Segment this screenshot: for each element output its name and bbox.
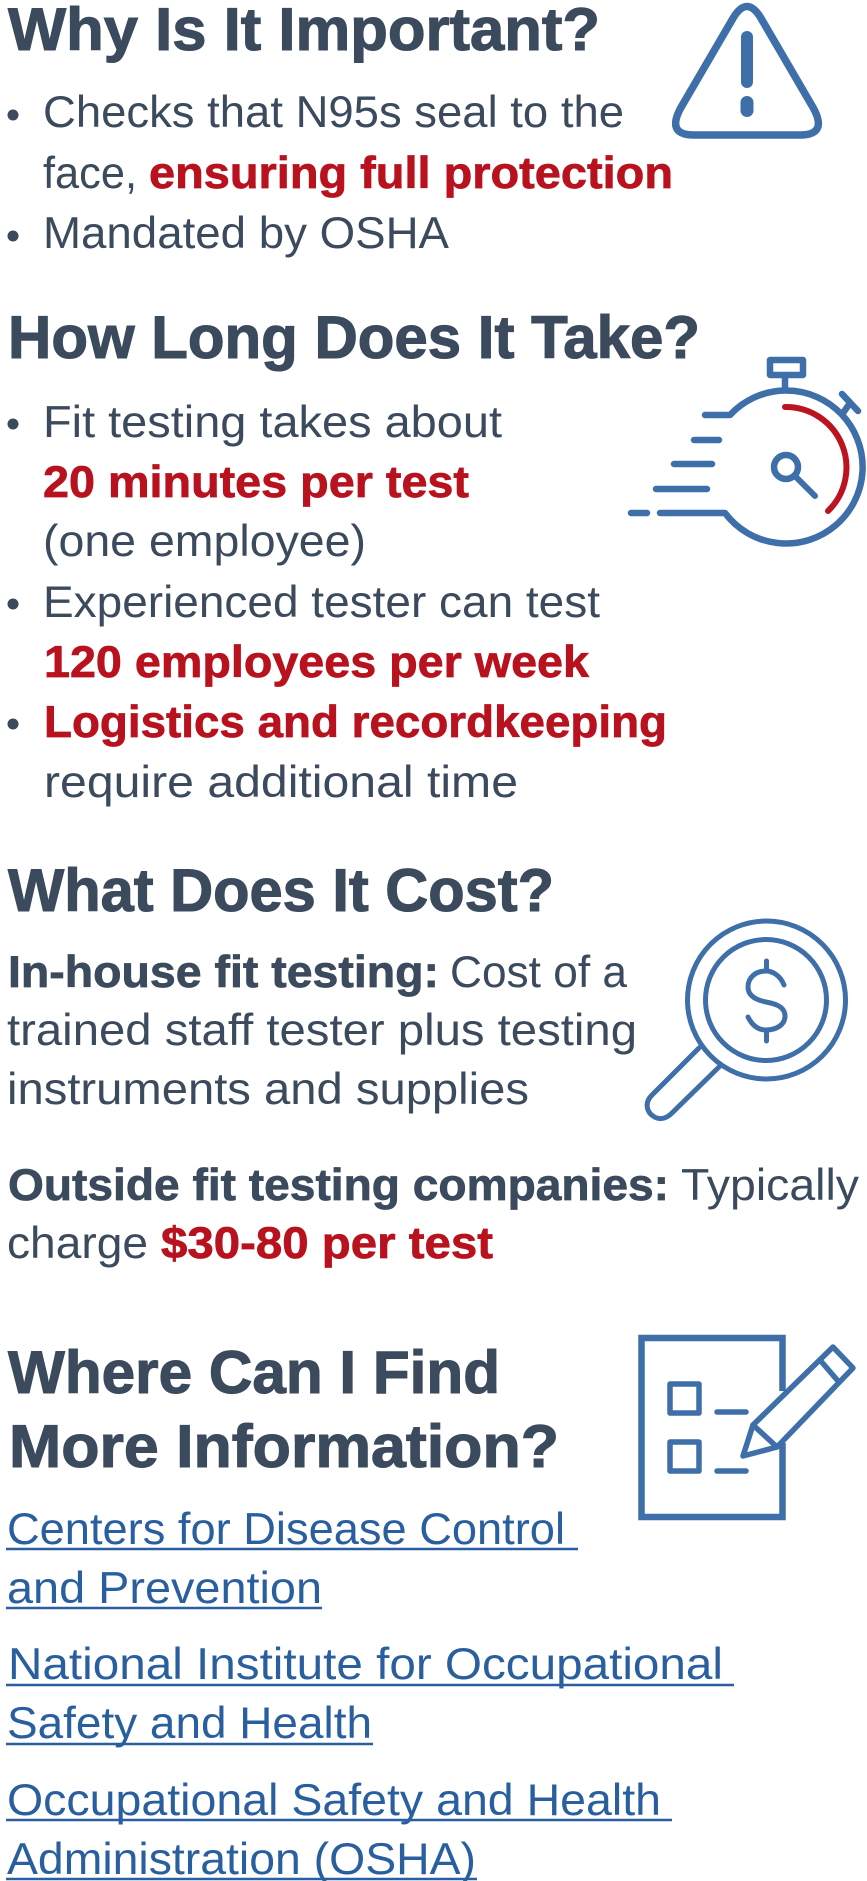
text block: in-house fit testing <box>7 948 637 1114</box>
bullet: 120 employees per week: 120 employees per week <box>44 638 589 687</box>
icon: magnifying glass with dollar sign <box>647 921 846 1119</box>
text block: in-house fit testing: trained staff tester plus testing <box>7 1006 637 1055</box>
icon: stopwatch <box>631 360 863 543</box>
heading: where can I find more information <box>8 1339 559 1480</box>
text block: in-house fit testing: In-house fit testing: <box>8 948 439 997</box>
bullet: 20 minutes per test: (one employee) <box>43 517 366 566</box>
text block: outside fit testing companies: Outside fit testing companies: <box>8 1161 669 1210</box>
bullet: checks N95 seal <box>8 88 673 198</box>
text block: outside fit testing companies: $30-80 per test <box>161 1219 493 1268</box>
icon: warning triangle <box>676 6 818 135</box>
bullet: 20 minutes per test: 20 minutes per test <box>43 458 469 507</box>
text block: in-house fit testing: instruments and supplies <box>7 1065 529 1114</box>
panel: how long does it take <box>8 304 863 807</box>
bullet: mandated by OSHA: Mandated by OSHA <box>43 209 449 258</box>
link: Centers for Disease Control and Prevention: Centers for Disease Control <box>7 1505 565 1554</box>
heading: where can I find more information: Where Can I Find <box>8 1339 500 1406</box>
link: Occupational Safety and Health Administration: Occupational Safety and Health <box>7 1776 661 1825</box>
bullet: logistics and recordkeeping <box>8 698 667 807</box>
text block: outside fit testing companies <box>7 1161 860 1268</box>
bullet: checks N95 seal: ensuring full protection <box>149 149 673 198</box>
link: National Institute for Occupational Safety and Health: National Institute for Occupational <box>8 1640 723 1689</box>
panel: where can I find more information <box>6 1338 853 1881</box>
link: Occupational Safety and Health Administration <box>6 1776 672 1881</box>
heading: what does it cost: What Does It Cost? <box>8 857 554 924</box>
bullet: 20 minutes per test: Fit testing takes about <box>43 398 503 447</box>
text block: outside fit testing companies: charge <box>7 1219 148 1268</box>
bullet: checks N95 seal: Checks that N95s seal to the <box>43 88 624 137</box>
panel: what does it cost <box>7 857 860 1268</box>
link: National Institute for Occupational Safety and Health: Safety and Health <box>7 1699 372 1748</box>
link: National Institute for Occupational Safety and Health <box>6 1640 734 1748</box>
text block: in-house fit testing: Cost of a <box>450 948 627 997</box>
bullet: checks N95 seal: face, <box>43 149 137 198</box>
icon: checklist and pencil <box>642 1338 853 1517</box>
heading: how long does it take: How Long Does It Take? <box>8 304 700 371</box>
bullet: 20 minutes per test <box>8 398 503 566</box>
bullet: logistics and recordkeeping: require additional time <box>44 758 518 807</box>
bullet: 120 employees per week: Experienced tester can test <box>43 578 601 627</box>
heading: where can I find more information: More Information? <box>9 1413 559 1480</box>
bullet: logistics and recordkeeping: Logistics and recordkeeping <box>44 698 667 747</box>
panel: why is it important <box>8 0 818 258</box>
bullet: 120 employees per week <box>8 578 601 687</box>
text block: outside fit testing companies: Typically <box>681 1161 860 1210</box>
link: Centers for Disease Control and Prevention <box>6 1505 578 1613</box>
link: Centers for Disease Control and Prevention: and Prevention <box>7 1564 322 1613</box>
